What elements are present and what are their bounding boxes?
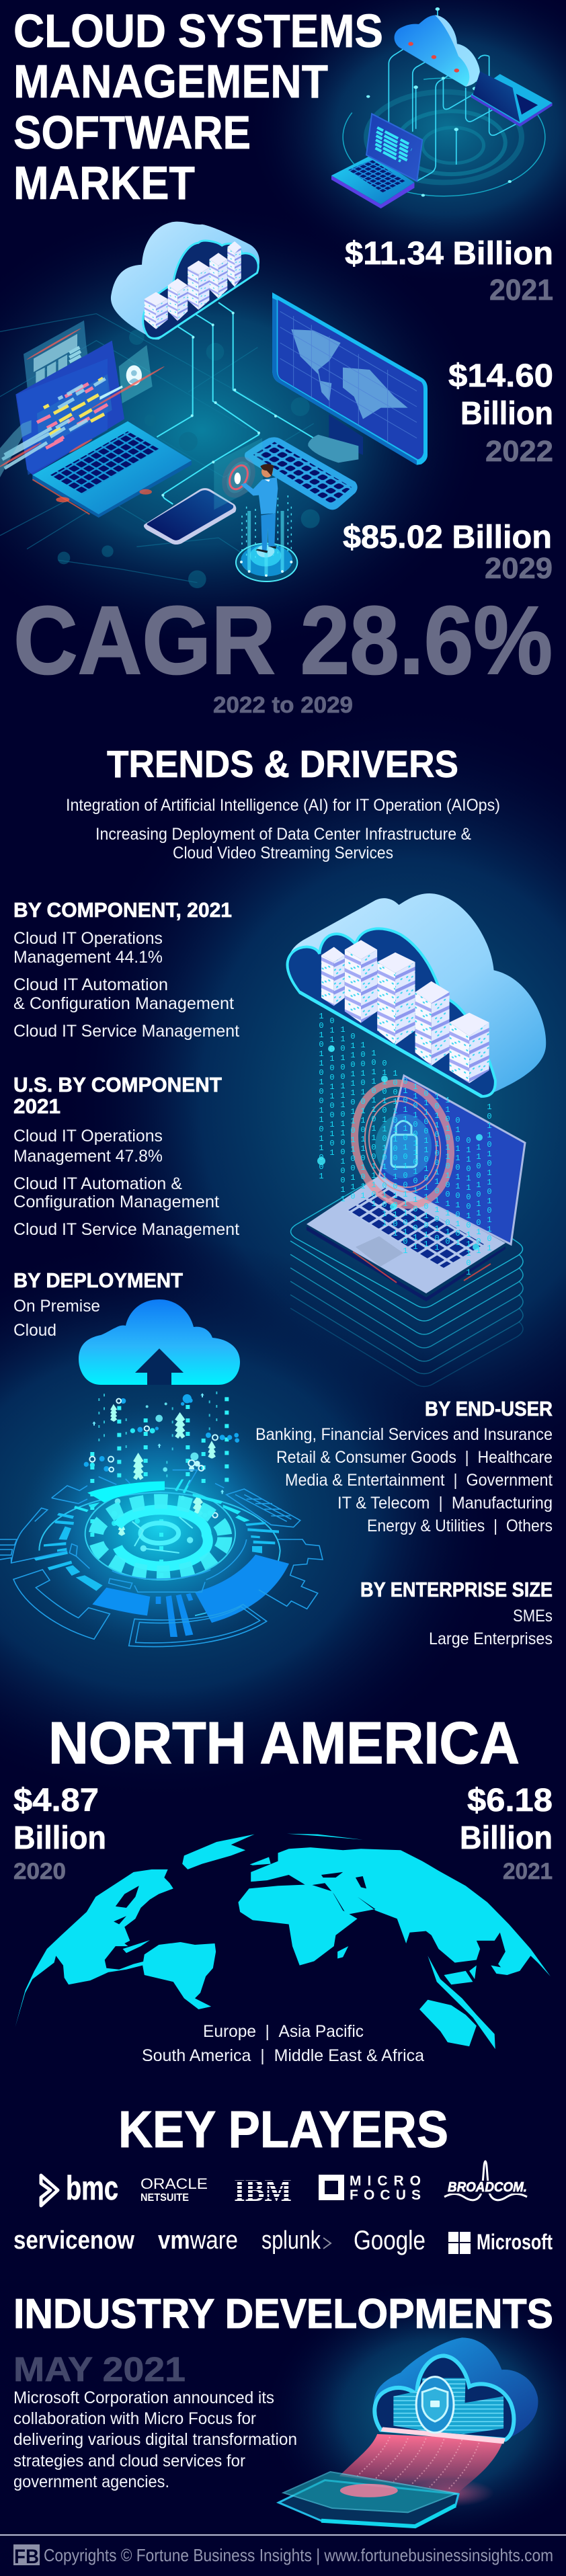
red light streaks	[0, 327, 165, 468]
title: MARKET	[13, 157, 195, 209]
stat: North America 2020	[13, 1783, 106, 1884]
binary rain: 011011101101100110	[348, 1032, 358, 1201]
date: MAY 2021	[13, 2350, 186, 2388]
icon: company logo: FB	[14, 2546, 39, 2568]
panel: by end-user: Banking, Financial Services and Insurance	[255, 1425, 553, 1444]
panel: by end-user	[255, 1397, 553, 1535]
divider line	[0, 2534, 566, 2536]
stacked grid chevrons	[290, 1176, 523, 1386]
logo: broadcom: BROADCOM.	[448, 2180, 527, 2195]
development text: government agencies.	[13, 2472, 169, 2491]
panel: by component: Cloud IT Service Management	[13, 1022, 239, 1041]
trends text: Increasing Deployment of Data Center Infrastructure &	[95, 825, 471, 844]
panel: US by component: Cloud IT Automation &	[13, 1174, 182, 1193]
logo: broadcom	[444, 2161, 527, 2200]
panel: US by component: Cloud IT Operations	[13, 1127, 163, 1145]
binary rain: 100110110011010101	[391, 1069, 400, 1238]
panel: by enterprise size: SMEs	[513, 1607, 553, 1625]
stat: North America 2020: Billion	[13, 1820, 106, 1856]
stat: 2021 market size: $11.34 Billion	[345, 236, 553, 272]
panel: by end-user: IT & Telecom | Manufacturing	[337, 1494, 553, 1513]
panel: US by component: Cloud IT Service Management	[13, 1220, 239, 1239]
icon: data cloud with servers	[288, 893, 546, 1097]
stat: 2029 market size: 2029	[485, 552, 553, 585]
panel: US by component: 2021	[13, 1094, 60, 1118]
panel: by deployment	[13, 1269, 183, 1340]
icon: floating panel behind laptop	[24, 321, 89, 397]
binary rain: 10010101101101011	[358, 1041, 368, 1201]
molecules	[84, 1394, 239, 1526]
development text: collaboration with Micro Focus for	[13, 2409, 256, 2428]
servers	[393, 2389, 426, 2431]
beam of data	[339, 2434, 503, 2493]
panel: by enterprise size	[360, 1578, 553, 1648]
icon: smartphone	[144, 488, 236, 545]
globe map	[15, 1834, 551, 2049]
logo: servicenow: servicenow	[13, 2226, 134, 2255]
heading: key players: KEY PLAYERS	[118, 2101, 448, 2159]
trends text: Integration of Artificial Intelligence (AI) for IT Operation (AIOps)	[66, 796, 500, 815]
binary rain: 1011010110101101	[485, 1102, 494, 1253]
logo: micro focus	[319, 2173, 421, 2203]
binary rain: 0101110101001110101	[401, 1077, 410, 1256]
regions list	[142, 2022, 424, 2065]
heading: north america: NORTH AMERICA	[48, 1709, 520, 1776]
panel: by component: Cloud IT Automation	[13, 975, 168, 994]
stat: 2021 market size	[345, 236, 553, 307]
stat: 2022 market size: 2022	[485, 435, 553, 468]
title: CLOUD SYSTEMS	[13, 5, 383, 57]
logo: google: Google	[354, 2226, 426, 2255]
icon: person	[241, 464, 278, 553]
icon: top cloud	[395, 15, 480, 87]
binary rain	[317, 1012, 494, 1277]
panel: US by component	[13, 1073, 239, 1239]
title: SOFTWARE	[13, 106, 251, 159]
icon: security cloud body	[374, 2337, 538, 2440]
stat: North America 2021: Billion	[460, 1820, 553, 1856]
logo: vmware: vmware	[158, 2226, 238, 2255]
panel: by end-user: BY END-USER	[425, 1397, 553, 1420]
glow sparks	[317, 1045, 483, 1250]
stat: 2022 market size	[448, 358, 553, 468]
logo: splunk: splunk	[261, 2226, 321, 2255]
panel: by enterprise size: Large Enterprises	[429, 1629, 553, 1648]
binary rain: 011010110101101011	[380, 1059, 389, 1228]
hologram lock	[214, 438, 264, 510]
panel: by end-user: Media & Entertainment | Government	[285, 1471, 553, 1490]
circuit lines	[157, 303, 314, 504]
development text: delivering various digital transformation	[13, 2430, 297, 2449]
panel: by deployment: Cloud	[13, 1321, 56, 1340]
binary rain: 01100110101101011	[421, 1089, 431, 1249]
icon: tablet	[279, 2480, 458, 2526]
illustration: secure cloud and tablet	[279, 2337, 538, 2526]
logo: oracle netsuite: NETSUITE	[140, 2192, 189, 2204]
trends text: Cloud Video Streaming Services	[173, 844, 393, 862]
panel: US by component: Configuration Management	[13, 1193, 219, 1211]
stat: North America 2021: $6.18	[467, 1783, 553, 1818]
icon: large monitor	[272, 292, 428, 465]
panel: by component: Cloud IT Operations	[13, 929, 163, 948]
small up arrows	[92, 1393, 224, 1494]
stat: 2021 market size: 2021	[489, 274, 553, 307]
glow spots	[115, 1402, 198, 1552]
heading: industry developments: INDUSTRY DEVELOPMENTS	[13, 2291, 553, 2337]
binary rain: 101011010011011001	[317, 1012, 326, 1181]
heading: trends and drivers: TRENDS & DRIVERS	[107, 743, 458, 786]
icon: shield lock	[416, 2377, 454, 2433]
icon: hero laptop	[15, 341, 192, 518]
panel: by component: & Configuration Management	[13, 994, 234, 1013]
panel: US by component: U.S. BY COMPONENT	[13, 1073, 222, 1096]
panel: by deployment: On Premise	[13, 1297, 100, 1316]
illustration: cloud data rain over laptop	[290, 1076, 525, 1386]
outlines	[0, 1470, 323, 1647]
development text: Microsoft Corporation announced its	[13, 2388, 274, 2407]
logo: micro focus: FOCUS	[350, 2187, 421, 2203]
panel: US by component: Management 47.8%	[13, 1147, 163, 1166]
icon: upload cloud	[79, 1299, 240, 1385]
ring segments	[87, 1481, 165, 1502]
panel: by component: Management 44.1%	[13, 948, 163, 967]
stat: 2029 market size: $85.02 Billion	[343, 520, 552, 555]
title	[13, 5, 383, 209]
rings	[140, 1523, 179, 1543]
regions list: Europe | Asia Pacific	[203, 2022, 364, 2041]
icon: right laptop	[471, 71, 553, 126]
binary rain: 011010011001101	[327, 1016, 337, 1158]
panel: by component: BY COMPONENT, 2021	[13, 898, 232, 922]
stat: 2022 market size: $14.60	[448, 358, 553, 394]
data columns	[92, 1397, 227, 1580]
illustration: cloud computing hero with person and devices	[0, 292, 428, 588]
panel: by deployment: BY DEPLOYMENT	[13, 1269, 183, 1292]
stat: North America 2020: $4.87	[13, 1783, 99, 1818]
logo: oracle netsuite	[140, 2175, 208, 2204]
development text: strategies and cloud services for	[13, 2452, 245, 2470]
laptop base	[307, 1226, 506, 1301]
stat: North America 2020: 2020	[13, 1859, 66, 1884]
icon: hero cloud with servers	[111, 222, 259, 339]
binary rain: 10110110110011101	[369, 1049, 378, 1209]
laptop screen	[379, 1076, 525, 1244]
stat: North America 2021: 2021	[503, 1859, 553, 1884]
logo: micro focus: MICRO	[350, 2173, 421, 2189]
binary rain: 10110100110110101	[432, 1092, 442, 1252]
binary rain: 1101001110110010011	[338, 1025, 348, 1204]
chevron arrows	[112, 1408, 214, 1535]
development text	[13, 2388, 297, 2491]
stat: 2022 market size: Billion	[460, 396, 553, 432]
title: MANAGEMENT	[13, 55, 328, 108]
icon: code panel	[0, 345, 153, 477]
binary rain: 110100110101101011	[411, 1082, 420, 1252]
icon: keyboard	[245, 437, 358, 510]
binary rain: 011011001011101	[464, 1136, 473, 1277]
logo: microsoft	[448, 2230, 553, 2254]
binary rain: 01011011010101	[453, 1116, 462, 1248]
logo: bmc	[41, 2169, 118, 2207]
illustration: cloud network with two laptops	[331, 7, 553, 208]
trends text	[66, 796, 500, 862]
pedestal	[236, 511, 297, 581]
stat: CAGR: 2022 to 2029	[213, 692, 353, 718]
logo: IBM: IBM	[234, 2173, 292, 2208]
panel: by end-user: Energy & Utilities | Others	[367, 1517, 553, 1535]
logo: oracle netsuite: ORACLE	[140, 2175, 208, 2192]
binary rain: 110010110101	[474, 1143, 483, 1256]
regions list: South America | Middle East & Africa	[142, 2046, 424, 2065]
binary rain: 1101011010011010	[443, 1096, 452, 1246]
illustration: HUD circuit dial	[0, 1392, 323, 1647]
security rings	[342, 1073, 463, 1215]
stat: 2029 market size	[343, 520, 553, 585]
logo: bmc: bmc	[66, 2169, 118, 2207]
stat: North America 2021	[460, 1783, 553, 1884]
panel: by component	[13, 898, 239, 1041]
icon: left laptop	[331, 114, 422, 208]
